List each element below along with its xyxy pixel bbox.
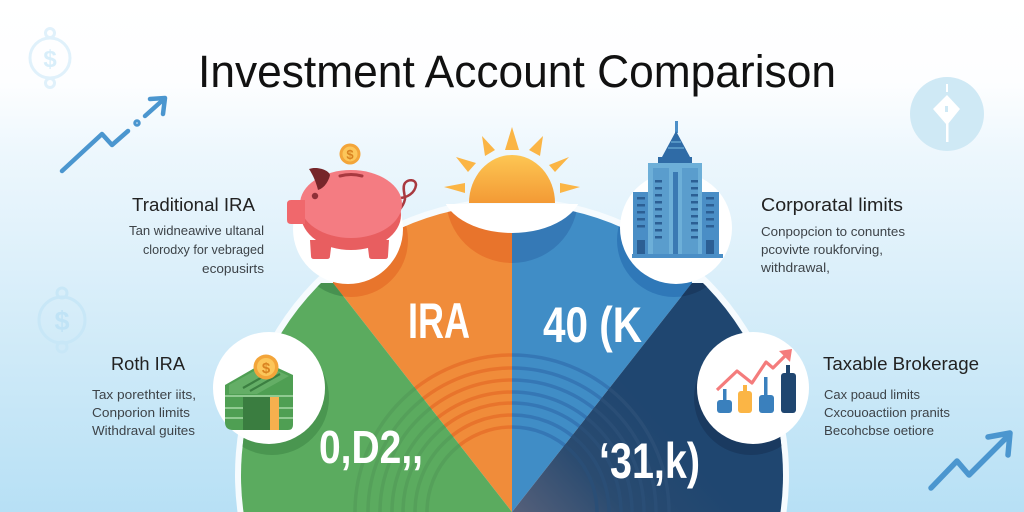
- icon: growth chart: [697, 332, 809, 444]
- shadow: money circle: [242, 373, 329, 455]
- text: Traditional IRA: ecopusirts: [202, 261, 265, 276]
- segment: blue 401k: [512, 180, 692, 512]
- label: 401k: 40 (K: [543, 297, 642, 353]
- rings: green part: [354, 387, 461, 512]
- rings: orange part: [414, 353, 512, 446]
- icon: office tower: [620, 121, 732, 284]
- segment: green Roth: [240, 283, 512, 512]
- chart: semicircular dome: [235, 202, 789, 512]
- icon: piggy bank: [287, 144, 416, 284]
- shadow: sun circle: [448, 211, 576, 263]
- shadow: chart circle: [694, 378, 782, 455]
- text: Taxable Brokerage: Cxcouoactiion pranits: [824, 405, 950, 420]
- text: Corporatal limits: withdrawal,: [760, 260, 830, 275]
- icon: dollar coin left: $: [54, 306, 70, 336]
- text: Corporatal limits: Corporatal limits: [761, 195, 903, 215]
- text: Traditional IRA: [129, 195, 265, 276]
- icon: cash stack: [213, 332, 325, 444]
- rings: blue part: [512, 353, 610, 446]
- segment: navy taxable: [512, 283, 790, 512]
- arrow: top left trend: [62, 98, 165, 171]
- text: Roth IRA: Withdraval guites: [92, 423, 196, 438]
- text: Corporatal limits: Conpopcion to conuntes: [761, 224, 906, 239]
- text: Traditional IRA: Tan widneawive ultanal: [129, 223, 264, 238]
- label: taxable value: ‘31,k): [599, 433, 700, 489]
- label: IRA: IRA: [408, 293, 470, 349]
- arrow: bottom right trend: [931, 433, 1010, 488]
- text: Roth IRA: Tax porethter iits,: [92, 387, 196, 402]
- text: Corporatal limits: [760, 195, 906, 275]
- icon: dollar coin top left: $: [43, 46, 57, 73]
- text: Traditional IRA: clorodxy for vebraged: [143, 242, 264, 257]
- icon: piggy bank: $: [346, 147, 354, 162]
- text: Taxable Brokerage: Cax poaud limits: [824, 387, 920, 402]
- icon: cash stack: $: [262, 360, 271, 377]
- segment: orange IRA: [333, 180, 512, 512]
- text: Taxable Brokerage: Becohcbse oetiore: [824, 423, 934, 438]
- icon: dollar coin left: [39, 288, 85, 352]
- icon: sun: [444, 127, 580, 203]
- text: Traditional IRA: Traditional IRA: [132, 195, 255, 215]
- icon: top right medallion: [910, 77, 984, 151]
- text: Taxable Brokerage: [823, 354, 979, 438]
- icon: dollar coin top left: [30, 28, 70, 88]
- label: Roth value: 0,D2,,: [319, 421, 423, 473]
- shadow: building circle: [617, 226, 707, 297]
- shadow: piggy circle: [318, 226, 408, 297]
- rings: navy part: [564, 388, 660, 512]
- title: Investment Account Comparison: [198, 46, 836, 97]
- text: Roth IRA: Conporion limits: [92, 405, 191, 420]
- text: Roth IRA: Roth IRA: [111, 354, 185, 374]
- white sun circle: [446, 204, 578, 233]
- text: Corporatal limits: pcovivte roukforving,: [761, 242, 883, 257]
- text: Roth IRA: [92, 354, 196, 438]
- text: Taxable Brokerage: Taxable Brokerage: [823, 354, 979, 374]
